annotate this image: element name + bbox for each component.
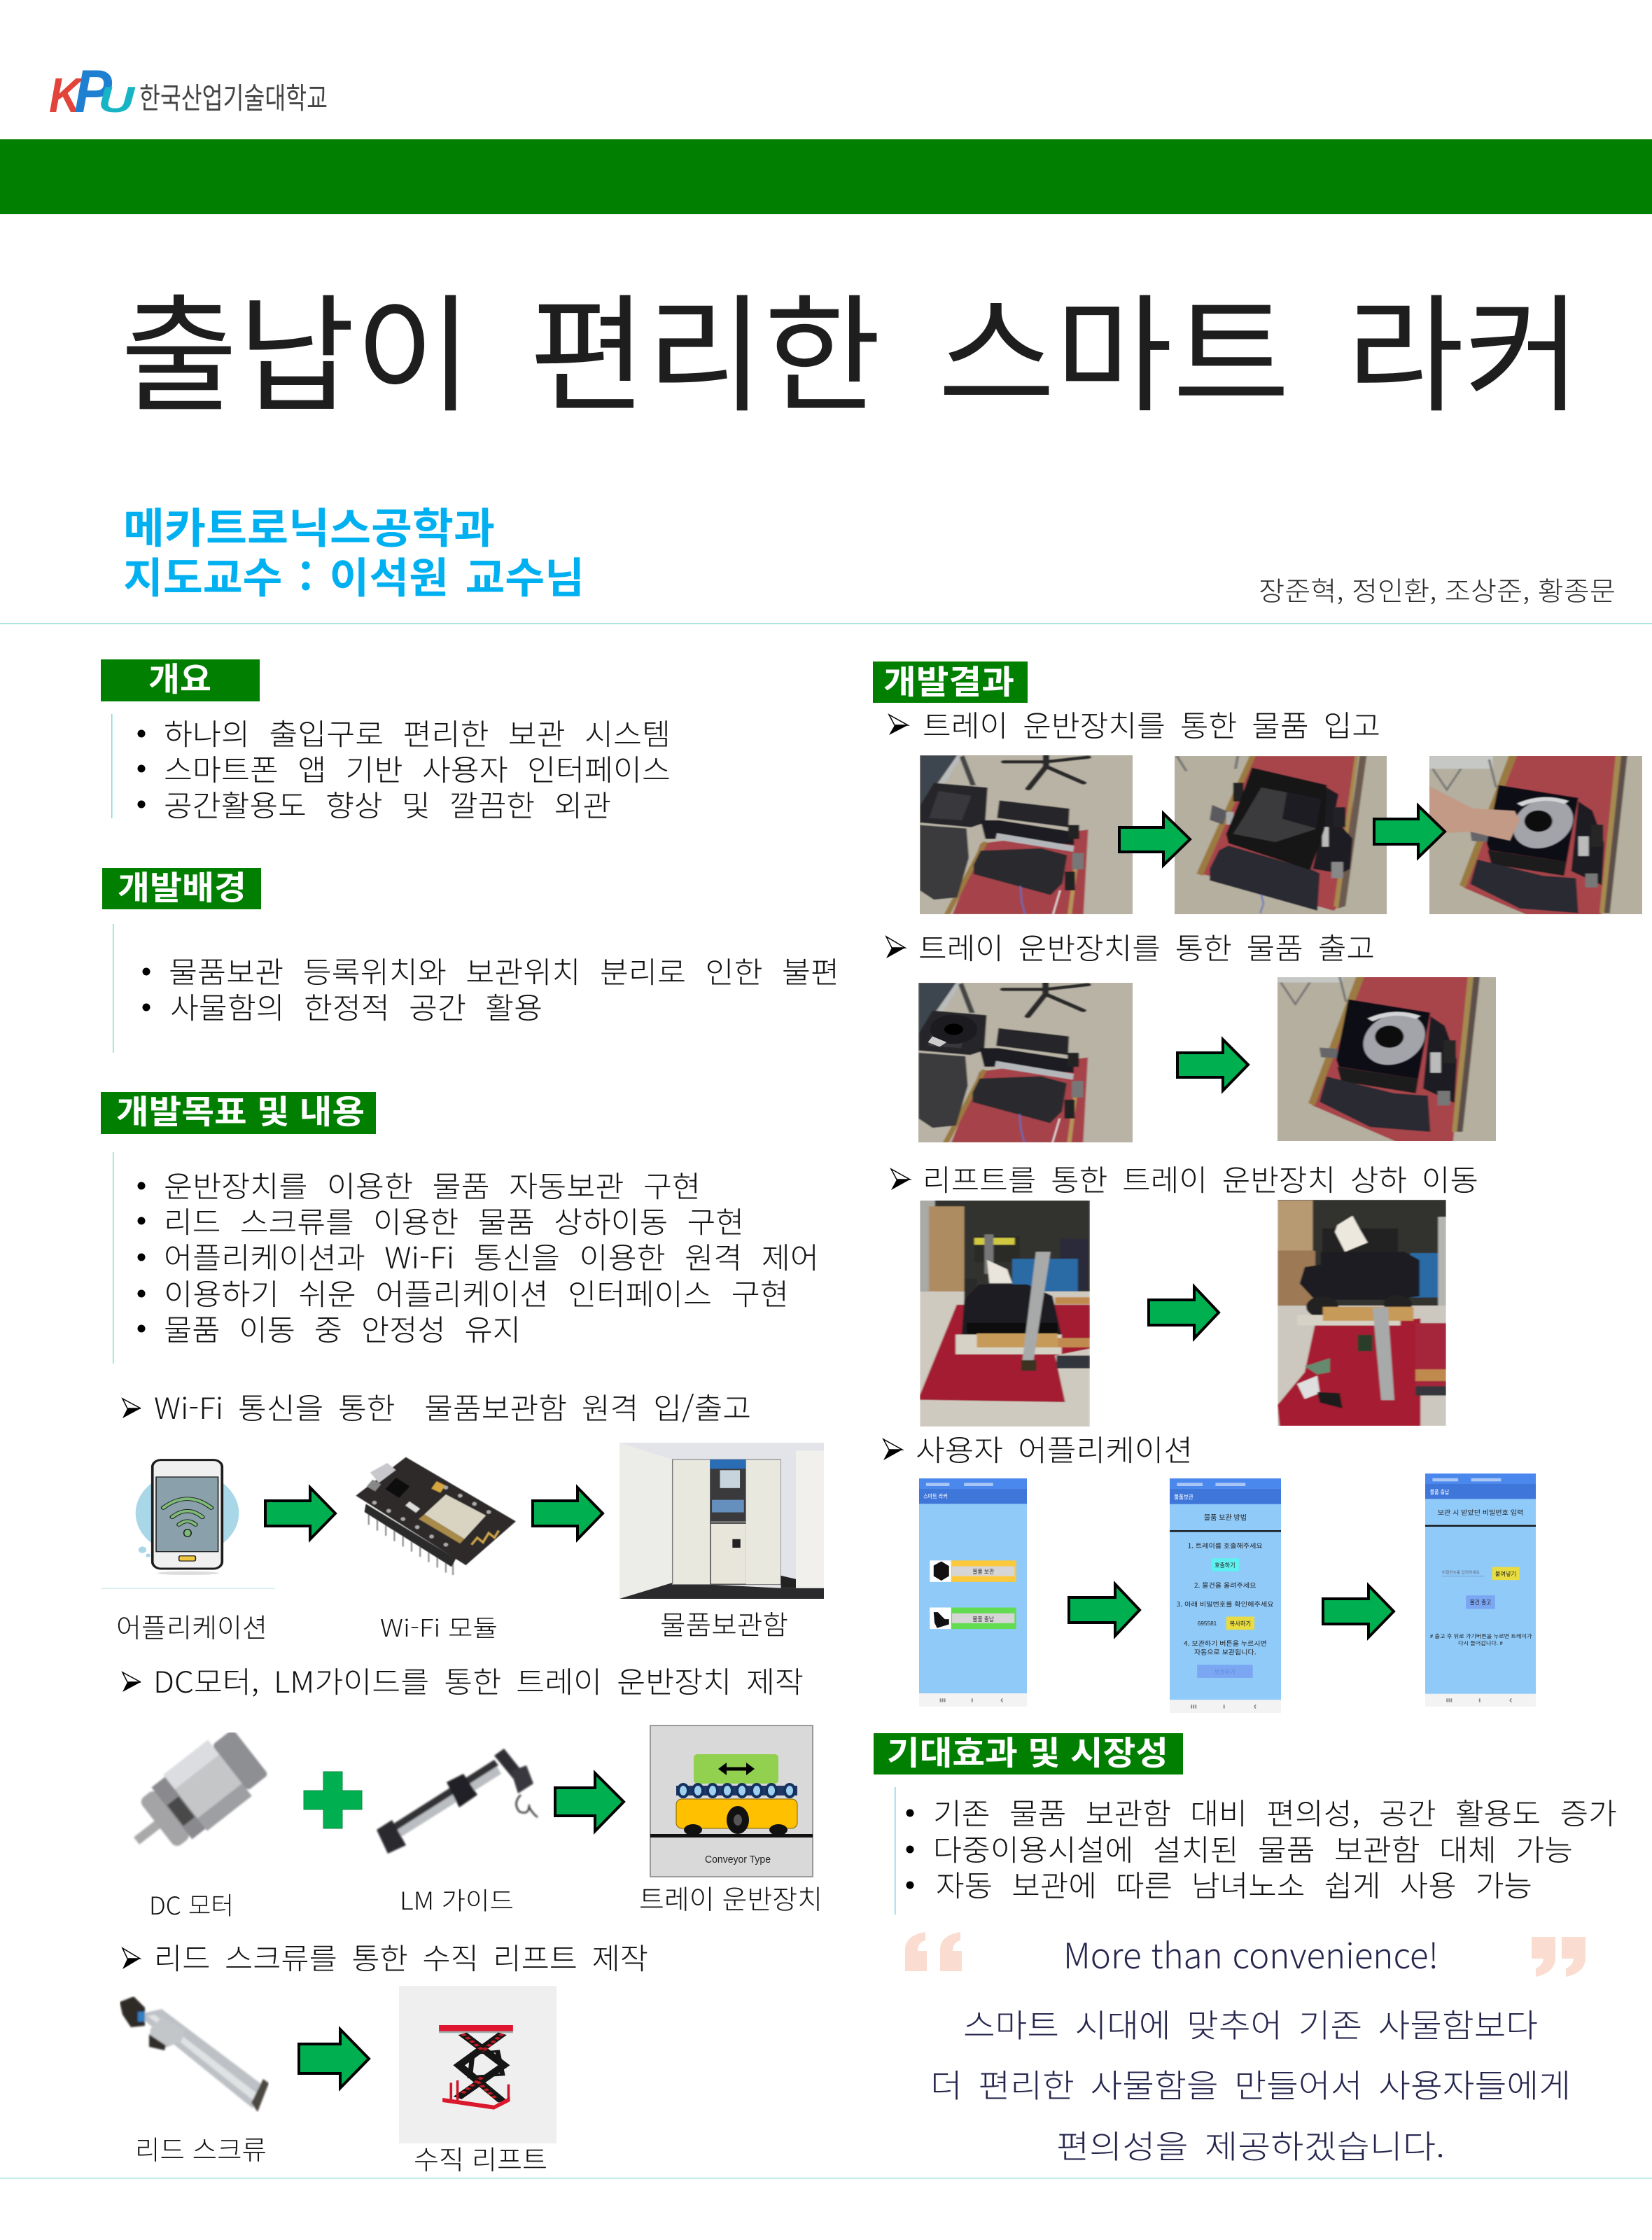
app screen 3: retrieve password: 다시 들어갑니다. # [1458,1639,1503,1647]
photo: lift low position [920,1200,1090,1427]
image: LM guide [375,1747,539,1855]
app screen 2: storage steps: 보관하기 [1214,1667,1236,1676]
icon: left quote mark [905,1932,962,1971]
heading: expected effects: 기대효과 및 시장성 [887,1726,1168,1774]
background bullets: 사물함의 한정적 공간 활용 [170,985,542,1028]
expected effects bullets: 자동 보관에 따른 남녀노소 쉽게 사용 가능 [936,1863,1532,1905]
header band [0,139,1652,214]
app screen 3: retrieve password [1425,1474,1536,1707]
label: DC motor: DC 모터 [149,1886,234,1922]
panel: goals and content [101,1085,819,1364]
heading: background: 개발배경 [118,861,246,909]
arrow [1119,813,1190,865]
app screen 3: retrieve password: 물품 출납 [1430,1487,1449,1496]
logo: K [49,68,84,122]
app screen 1: main menu [919,1478,1027,1707]
photo: lift high position [1278,1200,1446,1426]
label: lead screw: 리드 스크류 [135,2129,267,2167]
arrow [299,2029,369,2088]
app screen 3: retrieve password: 비밀번호를 입력하세요 [1442,1569,1480,1576]
overview bullets [137,711,671,825]
goals bullets: 리드 스크류를 이용한 물품 상하이동 구현 [164,1199,744,1242]
label: tray conveyor: 트레이 운반장치 [639,1878,822,1917]
photo: tray input step 3 [1429,756,1642,914]
overview bullets: 공간활용도 향상 및 깔끔한 외관 [164,783,611,825]
team members: 장준혁, 정인환, 조상준, 황종문 [1259,570,1616,608]
overview bullets: 스마트폰 앱 기반 사용자 인터페이스 [164,747,671,790]
app screen 2: storage steps: 호출하기 [1214,1560,1236,1569]
label: application: 어플리케이션 [116,1606,267,1645]
app screen 2: storage steps: 물품 보관 방법 [1204,1513,1247,1522]
quote headline: More than convenience! [1063,1928,1438,1979]
label: Wi-Fi module: Wi-Fi 모듈 [380,1609,498,1644]
subheading: lead screw: 리드 스크류를 통한 수직 리프트 제작 [154,1935,648,1978]
icon: right quote mark [1532,1937,1586,1977]
image: DC motor [133,1732,268,1847]
app screen 2: storage steps [1170,1478,1281,1713]
expected effects bullets: 다중이용시설에 설치된 물품 보관함 대체 가능 [933,1827,1573,1870]
image: Wi-Fi module [356,1457,517,1575]
label: LM guide: LM 가이드 [400,1882,514,1917]
subheading: tray conveyor: DC모터, LM가이드를 통한 트레이 운반장치 제작 [153,1659,804,1702]
department and advisor [123,495,584,606]
app screen 1: main menu: 물품 보관 [972,1567,994,1576]
logo [49,58,328,125]
panel: overview [101,652,671,825]
arrow [555,1773,624,1831]
title: 출납이 편리한 스마트 라커 [120,253,1581,438]
overview bullets: 하나의 출입구로 편리한 보관 시스템 [164,711,671,754]
photo: tray output step 2 [1278,977,1496,1141]
photo: tray input step 1 [920,755,1133,914]
goals bullets: 어플리케이션과 Wi-Fi 통신을 이용한 원격 제어 [164,1235,819,1278]
quote body: 스마트 시대에 맞추어 기존 사물함보다 [963,2001,1538,2047]
heading: overview [101,652,260,701]
icon: plus [304,1772,362,1828]
diagram: conveyor type [650,1726,813,1877]
arrow [1069,1584,1140,1636]
panel: background [102,861,839,1053]
goals bullets: 이용하기 쉬운 어플리케이션 인터페이스 구현 [164,1271,789,1314]
subheading: Wi-Fi: Wi-Fi 통신을 통한 물품보관함 원격 입/출고 [154,1385,751,1428]
label: vertical lift: 수직 리프트 [414,2138,547,2177]
logo: P [74,58,113,125]
app screen 3: retrieve password: 붙여넣기 [1495,1569,1516,1578]
goals bullets: 물품 이동 중 안정성 유지 [164,1307,521,1350]
quote body: 더 편리한 사물함을 만들어서 사용자들에게 [930,2061,1571,2107]
app screen 2: storage steps: 물품보관 [1174,1492,1194,1501]
heading: goals: 개발목표 및 내용 [116,1085,365,1133]
goals bullets [137,1163,819,1350]
expected effects bullets: 기존 물품 보관함 대비 편의성, 공간 활용도 증가 [933,1791,1617,1833]
app screen 2: storage steps: 복사하기 [1230,1618,1251,1628]
image: lead screw [120,1996,269,2112]
image: vertical scissor lift [399,1986,556,2143]
department and advisor: 메카트로닉스공학과 [123,495,495,556]
goals bullets: 운반장치를 이용한 물품 자동보관 구현 [164,1163,701,1206]
arrow [1374,806,1445,858]
arrow [1177,1040,1248,1091]
app screen 1: main menu: 스마트 라커 [923,1491,948,1500]
image: storage locker [620,1443,824,1599]
subheading: tray output: 트레이 운반장치를 통한 물품 출고 [918,925,1375,968]
subheading: application: 사용자 어플리케이션 [916,1427,1193,1470]
logo: 한국산업기술대학교 [139,75,328,118]
app screen 1: main menu: 물품 출납 [972,1614,994,1623]
quote body: 편의성을 제공하겠습니다. [1056,2122,1445,2168]
diagram: conveyor type: Conveyor Type [705,1854,771,1865]
photo: tray output step 1 [918,983,1133,1142]
arrow [1149,1287,1219,1338]
app screen 2: storage steps: 695581 [1198,1620,1217,1627]
department and advisor: 지도교수 : 이석원 교수님 [123,545,584,606]
subheading: lift: 리프트를 통한 트레이 운반장치 상하 이동 [923,1157,1478,1200]
subheading: tray input: 트레이 운반장치를 통한 물품 입고 [923,703,1380,746]
heading: overview: 개요 [148,652,211,701]
quote body [930,2001,1571,2168]
expected effects bullets [906,1791,1617,1905]
arrow [1323,1586,1394,1637]
logo: U [98,80,136,120]
arrow [533,1488,603,1539]
background bullets [143,949,839,1028]
background bullets: 물품보관 등록위치와 보관위치 분리로 인한 불편 [169,949,839,992]
label: storage box: 물품보관함 [660,1604,788,1642]
icon: phone with wifi [101,1459,276,1589]
panel: expected effects [874,1726,1617,1914]
photo: tray input step 2 [1175,756,1387,914]
arrow [265,1488,335,1539]
panel: results heading: 개발결과 [883,655,1014,704]
app screen 3: retrieve password: 물건 출고 [1470,1597,1491,1606]
